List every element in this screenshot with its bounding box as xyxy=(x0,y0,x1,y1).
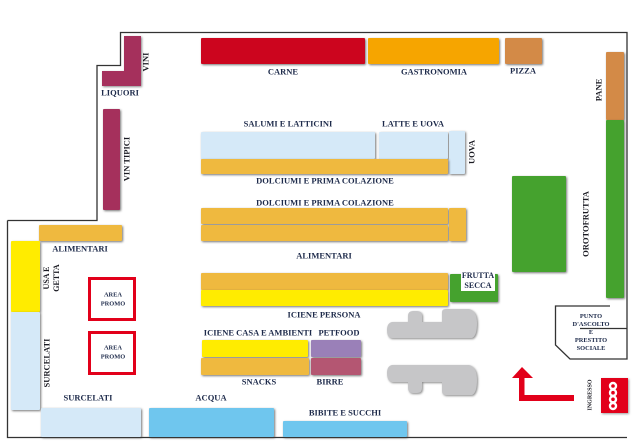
label: liquori: LIQUORI xyxy=(101,88,139,98)
label: pane: PANE xyxy=(594,79,604,101)
label: area promo 2: PROMO xyxy=(101,353,125,360)
label: punto d'ascolto: PUNTO xyxy=(580,313,602,320)
label: bibite e succhi: BIBITE E SUCCHI xyxy=(309,408,381,418)
shelf: dolciumi 1 xyxy=(201,159,448,174)
label: punto d'ascolto: SOCIALE xyxy=(577,345,605,352)
shelf: salumi e latticini xyxy=(201,132,375,159)
label: surgelati basso: SURCELATI xyxy=(64,392,112,402)
label: igiene persona: ICIENE PERSONA xyxy=(288,310,360,320)
label: salumi e latticini: SALUMI E LATTICINI xyxy=(244,118,332,128)
shelf: igiene casa xyxy=(202,340,308,357)
shelf: gastronomia xyxy=(368,38,499,64)
label: area promo 1: AREA xyxy=(104,292,122,298)
label: carne: CARNE xyxy=(268,66,298,76)
shelf: surgelati basso xyxy=(41,408,141,437)
label: area promo 1 xyxy=(100,292,125,307)
label: vini tipici: VIN TIPICI xyxy=(122,137,132,181)
label: punto d'ascolto: E xyxy=(589,329,593,336)
shelf: usa e getta xyxy=(11,241,40,312)
shelf: vini tipici xyxy=(103,109,120,210)
area promo 1 xyxy=(88,277,136,321)
label: area promo 2: AREA xyxy=(104,344,122,352)
label: usa e getta: USA E xyxy=(42,267,51,289)
shelf: bibite e succhi xyxy=(283,421,407,437)
shelf: petfood xyxy=(311,340,361,357)
shelf: frutta secca xyxy=(450,274,498,302)
shelf: dolciumi 3 xyxy=(201,225,448,241)
shelf: alimentari centrale xyxy=(201,273,448,290)
shelf: snacks xyxy=(201,358,309,375)
label: frutta secca: FRUTTA xyxy=(462,271,494,280)
shelf: acqua xyxy=(149,408,274,437)
label: punto d'ascolto xyxy=(572,313,610,352)
label: petfood: PETFOOD xyxy=(318,328,360,338)
label: pizza: PIZZA xyxy=(510,66,536,76)
label: snacks: SNACKS xyxy=(242,376,276,386)
label: acqua: ACQUA xyxy=(195,392,227,402)
label: ingresso: INGRESSO xyxy=(588,379,594,411)
label: frutta secca xyxy=(462,271,494,290)
shelf: pane xyxy=(606,52,624,120)
shelf: ortofrutta isola xyxy=(512,176,566,272)
label: vini: VINI xyxy=(140,53,150,71)
label: ortofrutta: OROTOFRUTTA xyxy=(580,191,590,257)
label: dolciumi 1: DOLCIUMI E PRIMA COLAZIONE xyxy=(256,176,394,186)
shelf: dolciumi 2 xyxy=(201,208,448,224)
shelf: surgelati parete xyxy=(11,312,40,410)
label: gastronomia: GASTRONOMIA xyxy=(401,66,467,76)
label: igiene casa: ICIENE CASA E AMBIENTI xyxy=(204,328,312,338)
label: alimentari centrale: ALIMENTARI xyxy=(296,250,352,260)
shelf: dolciumi testata xyxy=(449,208,466,241)
label: alimentari sinistra: ALIMENTARI xyxy=(52,244,108,254)
shelf: uova xyxy=(449,131,465,174)
shelf: igiene persona xyxy=(201,290,448,306)
shelf: pizza xyxy=(505,38,542,64)
label: punto d'ascolto: PRESTITO xyxy=(575,337,607,344)
label: surgelati parete: SURCELATI xyxy=(42,339,52,387)
label: area promo 2 xyxy=(100,344,125,360)
label background: frutta secca xyxy=(461,271,495,291)
label: usa e getta: GETTA xyxy=(52,264,61,292)
label: latte e uova: LATTE E UOVA xyxy=(382,118,444,128)
shelf: ortofrutta parete xyxy=(606,120,624,298)
label: usa e getta xyxy=(42,264,61,292)
label: dolciumi 2: DOLCIUMI E PRIMA COLAZIONE xyxy=(256,198,394,208)
label: birre: BIRRE xyxy=(317,376,343,386)
shelf: latte e uova xyxy=(379,132,448,159)
label: punto d'ascolto: D'ASCOLTO xyxy=(573,321,609,328)
label: uova: UOVA xyxy=(466,140,476,164)
shelf: birre xyxy=(311,358,361,375)
shelf: carne xyxy=(201,38,365,64)
shelf: alimentari sinistra xyxy=(39,225,122,241)
label: area promo 1: PROMO xyxy=(101,300,125,307)
area promo 2 xyxy=(88,331,136,375)
label: frutta secca: SECCA xyxy=(464,281,492,290)
